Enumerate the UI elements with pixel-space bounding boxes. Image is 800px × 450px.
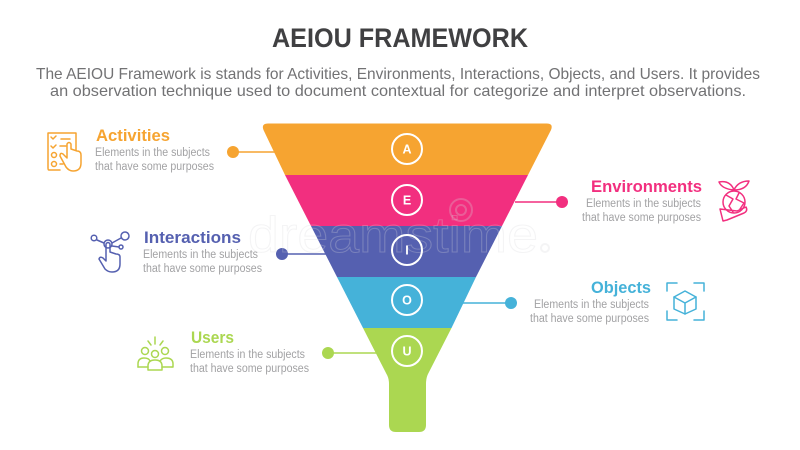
letter badge: A xyxy=(392,134,422,164)
text: activities: Activities xyxy=(96,127,170,145)
icon: environments globe in hand with leaves xyxy=(719,181,749,221)
funnel xyxy=(263,124,552,432)
connector: activities xyxy=(227,146,275,158)
text: environments: Elements in the subjects xyxy=(586,198,701,210)
icon: objects cube in frame xyxy=(667,283,704,320)
letter badge: O: O xyxy=(402,294,412,308)
text: objects: Elements in the subjects xyxy=(534,299,649,311)
text: interactions: Interactions xyxy=(144,229,241,247)
text: users: that have some purposes xyxy=(190,363,309,375)
text: users: Users xyxy=(191,329,234,347)
description text xyxy=(36,66,760,100)
text: environments xyxy=(582,178,702,224)
text: users: Elements in the subjects xyxy=(190,349,305,361)
connector: interactions xyxy=(276,248,327,260)
funnel band: U and spout xyxy=(363,328,452,432)
text: activities xyxy=(95,127,214,173)
watermark: dreamstime xyxy=(248,207,538,263)
text: objects: Objects xyxy=(591,279,651,297)
description text: The AEIOU Framework is stands for Activities, Environments, Interactions, Objects, and Users. It provides xyxy=(36,66,760,83)
letter badge: U xyxy=(392,336,422,366)
letter badge: O xyxy=(392,285,422,315)
text: objects xyxy=(530,279,651,325)
connector: environments xyxy=(515,196,568,208)
text: interactions: that have some purposes xyxy=(143,263,262,275)
letter badge: I: I xyxy=(405,244,409,258)
funnel band: I xyxy=(311,226,502,277)
text: objects: that have some purposes xyxy=(530,313,649,325)
letter badge: E: E xyxy=(403,194,411,208)
letter badge: E xyxy=(392,185,422,215)
funnel band: O xyxy=(337,277,476,328)
connector: objects xyxy=(463,297,517,309)
text: activities: that have some purposes xyxy=(95,161,214,173)
letter badge: U: U xyxy=(402,344,412,358)
description text: an observation technique used to document contextual for categorize and interpret observations. xyxy=(50,83,746,100)
text: environments: that have some purposes xyxy=(582,212,701,224)
icon: activities checklist with hand xyxy=(48,133,81,171)
connector: users xyxy=(322,347,377,359)
icon: interactions nodes with hand xyxy=(91,232,129,272)
text: activities: Elements in the subjects xyxy=(95,147,210,159)
text: environments: Environments xyxy=(591,178,702,196)
icon: users group xyxy=(138,337,173,370)
title: AEIOU FRAMEWORK xyxy=(272,23,528,53)
funnel band: E xyxy=(285,175,528,226)
text: users xyxy=(190,329,309,375)
funnel band: A xyxy=(263,124,552,175)
letter badge: A: A xyxy=(402,142,412,156)
text: interactions: Elements in the subjects xyxy=(143,249,258,261)
text: interactions xyxy=(143,229,262,275)
letter badge: I xyxy=(392,235,422,265)
